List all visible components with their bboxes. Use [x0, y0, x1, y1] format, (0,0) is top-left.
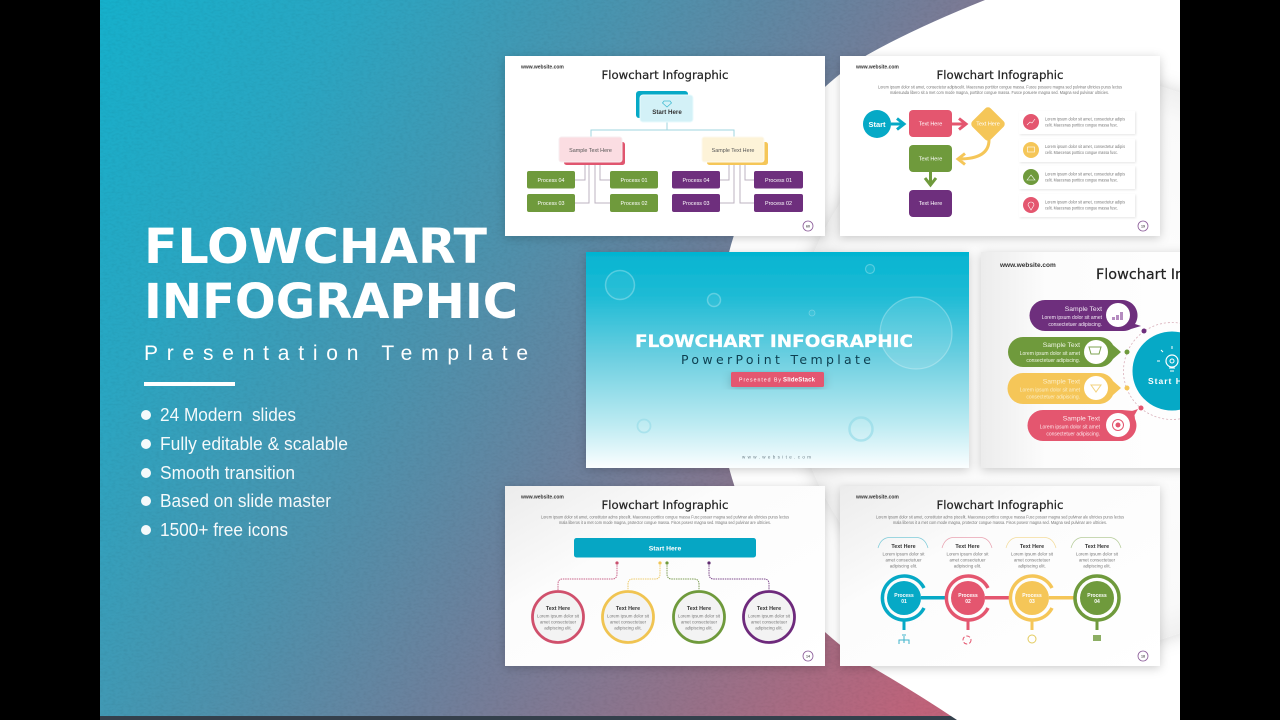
step 01: amet consectetuer	[885, 558, 922, 562]
panel: slide process flow	[840, 56, 1160, 236]
step 03	[1006, 538, 1056, 643]
step 02: Lorem ipsum dolor sit	[947, 552, 989, 556]
page number	[1138, 221, 1148, 231]
subtitle: Presentation Template	[144, 342, 528, 365]
connector bars	[921, 596, 1076, 600]
flow: start	[863, 110, 904, 138]
slide title: Flowchart Infographic	[602, 498, 728, 512]
circle purple	[744, 592, 794, 642]
step 02: Process	[958, 593, 978, 599]
pink sample box	[559, 137, 625, 165]
step 03: Process	[1022, 593, 1042, 599]
step 01: adipiscing elit.	[890, 564, 917, 568]
step 04: 04	[1094, 599, 1100, 605]
hero title: FLOWCHART INFOGRAPHIC	[635, 332, 913, 352]
purple pill: consectetuer adipiscing.	[1048, 322, 1102, 328]
circle pink: Lorem ipsum dolor sit	[537, 614, 580, 618]
hub circle	[1132, 332, 1180, 410]
circle yellow: Text Here	[616, 606, 640, 612]
panel: slide process timeline: www.website.com	[855, 494, 899, 500]
flow: pink step: Text Here	[919, 122, 942, 128]
yellow pill: consectetuer adipiscing.	[1026, 394, 1080, 400]
step 03: Text Here	[1020, 544, 1044, 550]
intro text	[878, 84, 1123, 95]
green process boxes: Process 01	[621, 178, 647, 184]
feature list: Smooth transition	[160, 463, 295, 483]
circle pink: adipiscing elit.	[544, 626, 572, 630]
intro text: mala liberos it a met com mode magna, protector congue massa. Fisos posesr magna sed. Magna sed pulvinar are ultricies.	[893, 520, 1107, 525]
legend card pink: celit. Maecenas porttico congue massa fusc.	[1045, 122, 1118, 128]
intro text: Lorem ipsum dolor sit amet, constitutor adms piscelit. Maecenas porttico congue massa Fusc posuer magna sed pulvinar ale ultricies purus lectus	[541, 514, 790, 520]
pink pill: Sample Text	[1063, 416, 1100, 422]
presenter badge: SlideStack	[783, 378, 816, 384]
purple process boxes: Process 03	[683, 201, 709, 207]
yellow sample box: Sample Text Here	[712, 148, 754, 154]
circle purple: Text Here	[757, 606, 781, 612]
intro text: mala liberos it a met com mode magna, protector congue massa. Fisos posesr magna sed. Magna sed pulvinar are ultricies.	[559, 520, 771, 525]
panel: slide process flow: www.website.com	[855, 64, 899, 70]
purple pill: Lorem ipsum dolor sit amet	[1042, 315, 1103, 321]
left text block	[141, 219, 528, 540]
circle green: adipiscing elit.	[685, 626, 713, 630]
dotted connectors	[558, 561, 769, 590]
page number: 18	[1141, 654, 1145, 658]
yellow pill: Lorem ipsum dolor sit amet	[1020, 388, 1081, 394]
flow: green step: Text Here	[919, 156, 942, 162]
slide title: Flowchart Infographic	[602, 68, 728, 82]
green pill	[1008, 337, 1130, 367]
page number: 60	[806, 224, 810, 228]
panel: hero slide	[586, 252, 969, 468]
circle yellow: adipiscing elit.	[614, 626, 642, 630]
purple pill	[1029, 300, 1146, 334]
step 04: amet consectetuer	[1079, 558, 1116, 562]
flow: purple step	[909, 190, 952, 217]
circle yellow: amet consectetuer	[610, 620, 647, 624]
circle green: Lorem ipsum dolor sit	[678, 614, 721, 618]
step 02: Text Here	[955, 544, 980, 550]
presenter badge: Presented By	[739, 378, 781, 384]
circle yellow: Lorem ipsum dolor sit	[607, 614, 650, 618]
panel: slide process timeline	[840, 486, 1160, 666]
step 04	[1071, 538, 1121, 641]
yellow pill: Sample Text	[1043, 378, 1080, 386]
purple process boxes: Process 01	[765, 178, 792, 184]
slide title: Flowchart Infographic	[936, 68, 1064, 82]
pink pill: Lorem ipsum dolor sit amet	[1040, 424, 1101, 430]
hero website: www.website.com	[742, 454, 811, 460]
feature list: 24 Modern slides	[160, 405, 296, 425]
purple process boxes: Process 04	[683, 178, 709, 184]
flow: yellow decision	[958, 106, 1006, 164]
feature list	[141, 405, 348, 540]
step 02: 02	[965, 599, 971, 605]
flow: pink step	[909, 110, 966, 137]
step 03: Lorem ipsum dolor sit	[1011, 552, 1054, 556]
circle green	[674, 592, 724, 642]
slide title: Flowchart Infographic	[936, 498, 1064, 512]
purple process boxes	[672, 171, 803, 212]
flow: green step	[909, 145, 952, 185]
main title	[144, 219, 518, 330]
legend cards	[1019, 111, 1135, 217]
bubbles	[606, 264, 952, 440]
purple process boxes: Process 02	[765, 201, 792, 207]
slide title: Flowchart Infographic	[1096, 267, 1252, 283]
step 01	[878, 538, 928, 644]
hero subtitle: PowerPoint Template	[681, 352, 871, 367]
step 04: adipiscing elit.	[1083, 564, 1111, 568]
circle green: Text Here	[687, 606, 711, 612]
green process boxes: Process 04	[538, 178, 564, 184]
circle purple: adipiscing elit.	[755, 626, 783, 630]
start box	[636, 91, 693, 122]
legend card green: celit. Maecenas porttico congue massa fusc.	[1045, 178, 1118, 182]
green process boxes: Process 03	[538, 201, 564, 207]
main title: FLOWCHART	[144, 219, 487, 275]
yellow sample box	[702, 137, 768, 165]
circle green: amet consectetuer	[681, 620, 718, 624]
legend card yellow: Lorem ipsum dolor sit amet, consectetur adipis	[1045, 144, 1126, 149]
panel: slide org chart: www.website.com	[520, 64, 564, 70]
legend card green	[1019, 166, 1135, 189]
feature list: Based on slide master	[160, 491, 331, 511]
feature list: Fully editable & scalable	[160, 434, 348, 454]
pink pill	[1028, 406, 1144, 441]
step 02: adipiscing elit.	[954, 564, 981, 568]
start box: Start Here	[652, 109, 682, 116]
page number	[803, 221, 813, 231]
legend card red	[1019, 194, 1135, 217]
green pill: Lorem ipsum dolor sit amet	[1020, 351, 1081, 357]
green pill: Sample Text	[1043, 342, 1080, 349]
green process boxes: Process 02	[621, 201, 647, 207]
flow: purple step: Text Here	[919, 201, 942, 207]
panel: slide hub diagram: www.website.com	[999, 262, 1056, 269]
legend card yellow	[1019, 139, 1135, 162]
page number	[1138, 651, 1148, 661]
legend card yellow: celit. Maecenas porttico congue massa fusc.	[1045, 150, 1118, 155]
pink sample box: Sample Text Here	[569, 148, 612, 154]
start button: Start Here	[649, 546, 681, 552]
step 03: 03	[1029, 599, 1035, 605]
purple pill: Sample Text	[1065, 306, 1102, 313]
panel: slide start here circles	[505, 486, 825, 666]
green process boxes	[527, 171, 658, 212]
yellow pill	[1008, 373, 1130, 404]
circle purple: amet consectetuer	[751, 620, 788, 624]
panel: slide start here circles: www.website.com	[520, 494, 564, 500]
step 01: Lorem ipsum dolor sit	[883, 552, 925, 556]
pink pill: consectetuer adipiscing.	[1046, 432, 1100, 438]
step 03: adipiscing elit.	[1018, 564, 1046, 568]
step 02: amet consectetuer	[949, 558, 986, 562]
legend card pink: Lorem ipsum dolor sit amet, consectetur adipis	[1045, 116, 1126, 122]
page number	[803, 651, 813, 661]
start button	[574, 538, 756, 558]
circle pink: Text Here	[546, 606, 570, 612]
green pill: consectetuer adipiscing.	[1026, 358, 1080, 364]
presenter badge	[731, 372, 824, 387]
circle pink	[532, 592, 584, 642]
circle yellow	[602, 592, 654, 642]
legend card green: Lorem ipsum dolor sit amet, consectetur adipis	[1045, 172, 1126, 176]
panel: slide hub diagram	[976, 250, 1180, 474]
step 04: Lorem ipsum dolor sit	[1076, 552, 1119, 556]
intro text: Lorem ipsum dolor sit amet, consectetur adipiscelit. Maecenas porttitor congue massa. Fusce posuere magna sed pulvinar ultricies purus lectus	[878, 84, 1123, 90]
step 04: Text Here	[1085, 544, 1109, 550]
step 02	[942, 538, 992, 644]
feature list: 1500+ free icons	[160, 520, 288, 540]
circle pink: amet consectetuer	[540, 620, 577, 624]
circle purple: Lorem ipsum dolor sit	[748, 614, 791, 618]
legend card red: Lorem ipsum dolor sit amet, consectetur adipis	[1045, 200, 1126, 204]
page number: 14	[806, 654, 810, 658]
step 03: amet consectetuer	[1014, 558, 1051, 562]
hub circle: Start Here	[1148, 376, 1199, 386]
page number: 19	[1141, 224, 1145, 228]
step 01: Text Here	[891, 544, 916, 550]
main title: INFOGRAPHIC	[144, 274, 518, 330]
dashed ring	[1123, 322, 1180, 420]
connector lines	[591, 122, 734, 138]
flow: yellow decision: Text Here	[976, 122, 1000, 128]
process connectors	[575, 165, 754, 203]
intro text	[876, 514, 1125, 525]
step 04: Process	[1087, 593, 1107, 599]
intro text: Lorem ipsum dolor sit amet, constitutor adms piscelit. Maecenas porttico congue massa Fusc posuer magna sed pulvinar ale ultricies purus lectus	[876, 514, 1125, 520]
panel: slide org chart	[505, 56, 825, 236]
intro text: malesuada libero sit a met com mode magna, porttitor congue massa. Fusce posuere magna sed. Magna sed pulvinar ultricies.	[890, 90, 1109, 95]
step 01: 01	[901, 599, 907, 605]
step 01: Process	[894, 593, 914, 599]
accent divider	[144, 382, 235, 386]
intro text	[541, 514, 790, 525]
legend card red: celit. Maecenas porttico congue massa fusc.	[1045, 206, 1118, 210]
legend card pink	[1019, 111, 1135, 134]
flow: start: Start	[868, 120, 886, 129]
